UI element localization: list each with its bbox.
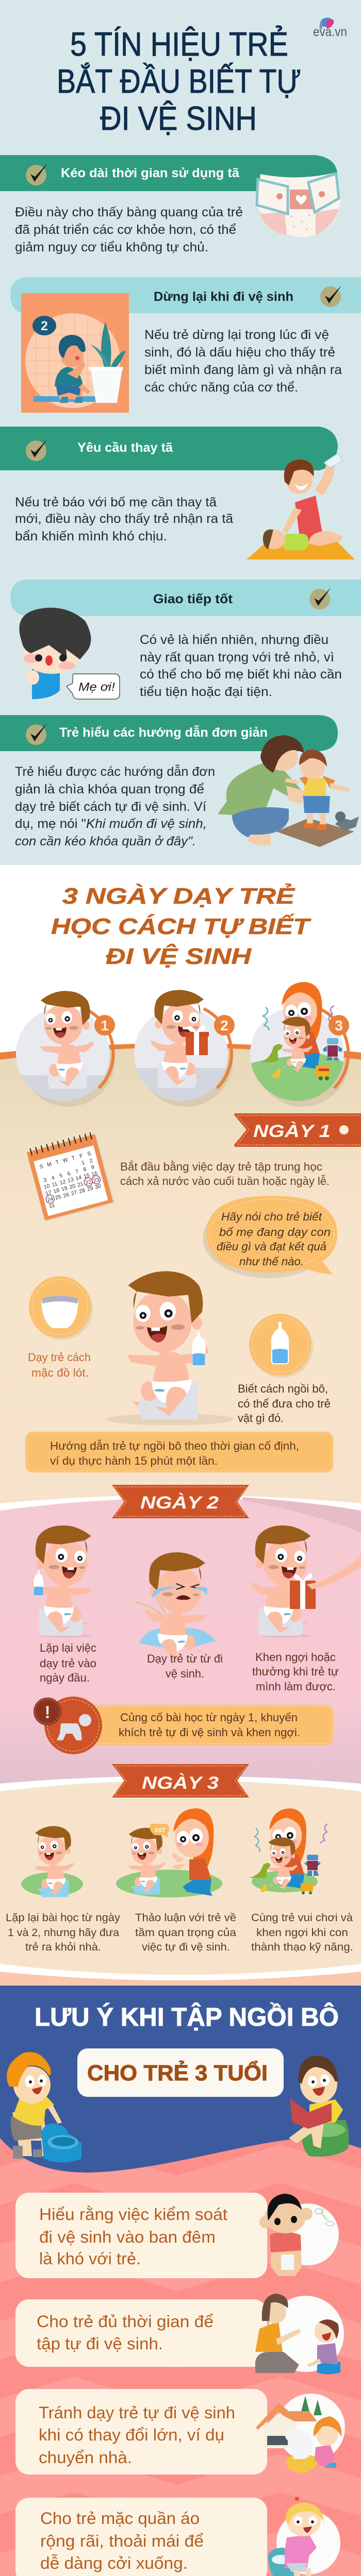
number 3 bbox=[329, 1015, 349, 1036]
icon: calendar: 20 bbox=[69, 1183, 76, 1191]
illustration: day 3 play bbox=[249, 1808, 327, 1894]
heading bar 3 bbox=[0, 427, 338, 470]
panel: signal 2 bbox=[10, 277, 361, 413]
body text 5: con cần kéo khóa quần ở đây". bbox=[15, 834, 196, 849]
text: day 1 intro: Bắt đầu bằng việc dạy trẻ tập trung học bbox=[120, 1160, 322, 1173]
icon: calendar: 18 bbox=[53, 1187, 60, 1195]
body text 2: biết mình đang làm gì và nhận ra bbox=[144, 363, 342, 377]
text: sit on potty: vật gì đó. bbox=[238, 1412, 284, 1425]
body text 5: giản là chìa khóa quan trọng để bbox=[15, 782, 204, 796]
ribbon: NGÀY 1: NGÀY 1 bbox=[253, 1122, 331, 1141]
callout: speech bubble: điều gì và đạt kết quả bbox=[217, 1240, 326, 1253]
body text 4: Có vẻ là hiển nhiên, nhưng điều bbox=[140, 633, 329, 647]
callout: day 2 box: khích trẻ tự đi vệ sinh và khen ngợi. bbox=[119, 1726, 300, 1739]
text: sit on potty: có thể đưa cho trẻ bbox=[238, 1397, 331, 1410]
text: day 2 column 1: dạy trẻ vào bbox=[40, 1657, 96, 1670]
icon: calendar: S bbox=[39, 1163, 44, 1170]
text: sit on potty: Biết cách ngồi bô, bbox=[238, 1382, 328, 1395]
icon: check 1 bbox=[26, 163, 47, 185]
illustration: girl with teal potty bbox=[268, 2497, 324, 2576]
icon: calendar: 5 bbox=[59, 1173, 63, 1179]
ribbon: NGÀY 3: NGÀY 3 bbox=[142, 1773, 219, 1793]
body text 4: có thể cho bố mẹ biết khi nào cần bbox=[140, 667, 342, 682]
text: day 3 column 2: việc tự đi vệ sinh. bbox=[142, 1941, 230, 1953]
text: day 2 column 2: Dạy trẻ từ từ đi bbox=[147, 1652, 223, 1665]
body text 3 bbox=[15, 495, 233, 544]
icon: check 5 bbox=[26, 723, 47, 745]
icon: calendar: 12 bbox=[59, 1179, 67, 1186]
illustration: worried baby bbox=[259, 2194, 313, 2276]
callout: Mẹ ơi: Mẹ ơi! bbox=[78, 680, 116, 693]
number 1 bbox=[94, 1015, 115, 1036]
callout: sst: SST bbox=[154, 1827, 166, 1834]
circle step 3 bbox=[250, 982, 349, 1107]
icon: crawling baby circle bbox=[34, 1697, 102, 1754]
icon: bottle circle bbox=[249, 1314, 313, 1378]
body text 1: đã phát triển các cơ khỏe hơn, có thể bbox=[15, 223, 236, 237]
icon: toy dinosaur bbox=[260, 1044, 283, 1062]
icon: underwear circle bbox=[29, 1276, 93, 1340]
callout: fixed time box: ví dụ thực hành 15 phút một lần. bbox=[50, 1454, 218, 1467]
text: day 2 column 3: mình làm được. bbox=[256, 1680, 336, 1693]
icon: calendar: M bbox=[46, 1161, 53, 1168]
text: day 3 column 2: tầm quan trọng của bbox=[135, 1927, 236, 1939]
icon: gift bbox=[185, 1025, 209, 1055]
white backdrop 1 bbox=[277, 2204, 339, 2265]
text: day 2 column 3: Khen ngợi hoặc bbox=[255, 1651, 336, 1664]
title: 3 days bbox=[51, 883, 311, 969]
icon: calendar: 13 bbox=[67, 1176, 74, 1184]
icon: calendar: 9 bbox=[91, 1164, 95, 1171]
title: notes: LƯU Ý KHI TẬP NGỒI BÔ bbox=[35, 2002, 339, 2031]
card shape 2 bbox=[15, 2299, 267, 2367]
body text 1 bbox=[15, 205, 243, 255]
text: day 2 column 3: thưởng khi trẻ tự bbox=[252, 1665, 339, 1678]
icon: check 4 bbox=[309, 587, 331, 609]
text: day 1 intro bbox=[120, 1160, 330, 1188]
panel: signal 3 bbox=[0, 427, 355, 560]
title: 3 days: HỌC CÁCH TỰ BIẾT bbox=[51, 913, 311, 939]
illustration: mother changing diaper bbox=[247, 453, 355, 560]
text 3 bbox=[39, 2403, 235, 2467]
body text 2 bbox=[144, 328, 342, 395]
text: day 1 intro: cách xả nước vào cuối tuần hoặc ngày lễ. bbox=[120, 1175, 330, 1188]
illustration: mother and child bbox=[218, 735, 359, 847]
body text 2: các chức năng của cơ thể. bbox=[144, 380, 298, 395]
text: day 2 column 1 bbox=[40, 1641, 96, 1684]
icon: calendar: 19 bbox=[61, 1185, 68, 1193]
badge: for 3-year-olds bbox=[77, 2048, 284, 2097]
body text 1: giảm nguy cơ tiểu không tự chủ. bbox=[15, 240, 208, 255]
heading bar 5 bbox=[0, 715, 338, 751]
body text 2: sinh, đó là dấu hiệu cho thấy trẻ bbox=[144, 345, 335, 360]
text 1: là khó với trẻ. bbox=[39, 2249, 141, 2268]
text 2: Cho trẻ đủ thời gian để bbox=[37, 2312, 214, 2331]
white backdrop 2 bbox=[268, 2296, 344, 2372]
icon: calendar: 10 bbox=[43, 1183, 51, 1191]
card 3: avoid big changes bbox=[15, 2389, 345, 2475]
icon: calendar: 23 bbox=[93, 1177, 100, 1184]
text: day 2 column 1: Lặp lại việc bbox=[40, 1641, 96, 1654]
heading bar 1 bbox=[0, 155, 338, 191]
icon: calendar: 7 bbox=[75, 1168, 79, 1175]
text: day 3 column 1: Lặp lại bài học từ ngày bbox=[6, 1912, 121, 1924]
text: day 3 column 2 bbox=[135, 1912, 236, 1953]
icon: calendar: 8 bbox=[83, 1166, 87, 1173]
icon: toy duck bbox=[272, 1069, 281, 1078]
illustration: kid reading on green potty bbox=[289, 2056, 349, 2157]
panel: signal 1 bbox=[0, 155, 340, 255]
panel: day 2 background bbox=[0, 1495, 361, 1793]
callout: day 2 box bbox=[88, 1705, 333, 1745]
title: 3 days: ĐI VỆ SINH bbox=[106, 943, 252, 969]
icon: calendar: 25 bbox=[55, 1194, 62, 1201]
text 4 bbox=[40, 2509, 204, 2572]
text 4: dễ dàng cởi xuống. bbox=[40, 2554, 188, 2572]
circle step 2 bbox=[134, 990, 235, 1107]
body text 3: mới, điều này cho thấy trẻ nhận ra tã bbox=[15, 512, 233, 526]
illustration: baby on potty with bottle bbox=[107, 1271, 234, 1425]
callout: speech bubble: Hãy nói cho trẻ biết bbox=[221, 1210, 322, 1223]
icon: calendar: F bbox=[79, 1153, 84, 1160]
icon: calendar: 3 bbox=[43, 1177, 47, 1183]
text 3: khi có thay đổi lớn, ví dụ bbox=[39, 2426, 224, 2444]
panel: signal 4 bbox=[10, 580, 361, 699]
icon: calendar: 30 bbox=[94, 1183, 102, 1191]
logo: eva.vn: eva.vn bbox=[313, 25, 347, 39]
text: teach underwear bbox=[28, 1351, 91, 1379]
heading bar 4 bbox=[10, 580, 361, 616]
card 2: enough time bbox=[15, 2294, 344, 2374]
callout: fixed time box bbox=[25, 1432, 333, 1472]
illustration: day 2 crying baby bbox=[135, 1552, 216, 1661]
card shape 3 bbox=[15, 2389, 267, 2475]
body text 4: này rất quan trọng với trẻ nhỏ, vì bbox=[140, 650, 334, 665]
icon: calendar: 6 bbox=[67, 1171, 71, 1177]
text 4: rộng rãi, thoải mái để bbox=[40, 2532, 204, 2550]
icon: calendar: 14 bbox=[75, 1174, 83, 1182]
badge: for 3-year-olds: CHO TRẺ 3 TUỔI bbox=[87, 2060, 268, 2086]
body text 3: bẩn khiến mình khó chịu. bbox=[15, 529, 167, 544]
body text 1: Điều này cho thấy bàng quang của trẻ bbox=[15, 205, 243, 219]
title: 3 days: 3 NGÀY DẠY TRẺ bbox=[62, 883, 296, 909]
icon: calendar: 16 bbox=[91, 1170, 99, 1178]
card 4: loose clothes bbox=[15, 2497, 340, 2576]
icon: calendar: 11 bbox=[51, 1181, 58, 1188]
illustration: boy and plant: 2 bbox=[41, 319, 48, 333]
icon: check 2 bbox=[320, 285, 342, 307]
panel: signal 5 bbox=[0, 715, 359, 849]
text: day 3 column 1: 1 và 2, nhưng hãy đưa bbox=[8, 1927, 119, 1939]
panel: 3 days background bbox=[0, 865, 361, 1515]
heading text 5: Trẻ hiểu các hướng dẫn đơn giản bbox=[59, 724, 268, 740]
text 1: đi vệ sinh vào ban đêm bbox=[39, 2228, 216, 2246]
heading text 3: Yêu cầu thay tã bbox=[77, 440, 173, 455]
number 2: 2 bbox=[220, 1018, 228, 1033]
number 1: 1 bbox=[101, 1018, 109, 1033]
callout: fixed time box: Hướng dẫn trẻ tự ngồi bô theo thời gian cố định, bbox=[50, 1439, 299, 1452]
icon: calendar: 27 bbox=[71, 1190, 78, 1197]
text: day 3 column 1: trẻ ra khỏi nhà. bbox=[25, 1941, 101, 1953]
icon: toy robot bbox=[323, 1038, 342, 1060]
heading text 1: Kéo dài thời gian sử dụng tã bbox=[61, 166, 239, 180]
text: day 3 column 1 bbox=[6, 1912, 121, 1953]
text: day 2 column 3 bbox=[252, 1651, 339, 1693]
white backdrop 4 bbox=[276, 2511, 340, 2574]
card shape 4 bbox=[15, 2498, 267, 2576]
callout: Mẹ ơi bbox=[67, 674, 120, 699]
title: 5 signals: BẮT ĐẦU BIẾT TỰ bbox=[57, 62, 301, 100]
icon: calendar: 4 bbox=[51, 1175, 55, 1181]
text 2 bbox=[37, 2312, 214, 2353]
icon: calendar: W bbox=[62, 1157, 69, 1164]
body text 3: Nếu trẻ báo với bố mẹ cần thay tã bbox=[15, 495, 217, 510]
illustration: boy and plant bbox=[21, 293, 129, 413]
illustration: kid with blue potty bbox=[7, 2052, 81, 2163]
text 3: Tránh dạy trẻ tự đi vệ sinh bbox=[39, 2403, 235, 2422]
icon: calendar: 31 bbox=[48, 1202, 56, 1210]
icon: calendar: T bbox=[55, 1159, 60, 1166]
ribbon: NGÀY 2: NGÀY 2 bbox=[140, 1493, 219, 1513]
icon: calendar: 24 bbox=[46, 1196, 54, 1204]
icon: calendar: 17 bbox=[45, 1189, 52, 1197]
icon: toy train bbox=[316, 1065, 330, 1080]
icon: calendar: 2 bbox=[89, 1158, 93, 1164]
text 1 bbox=[39, 2205, 227, 2268]
white backdrop 3 bbox=[277, 2394, 345, 2462]
title: 5 signals bbox=[57, 25, 301, 137]
icon: calendar: 28 bbox=[78, 1187, 86, 1195]
text 3: chuyển nhà. bbox=[39, 2448, 132, 2467]
illustration: day 2 baby with gift bbox=[251, 1526, 361, 1637]
ribbon: NGÀY 1 bbox=[234, 1113, 361, 1147]
text: day 2 column 1: ngày đầu. bbox=[40, 1671, 90, 1684]
icon: calendar: 1 bbox=[81, 1160, 86, 1166]
text: day 3 column 2: Thảo luận với trẻ về bbox=[135, 1912, 236, 1924]
callout: speech bubble bbox=[203, 1196, 337, 1278]
body text 4: tiểu tiện hoặc đại tiện. bbox=[140, 685, 272, 699]
callout: sst bbox=[150, 1824, 169, 1838]
circle step 1 bbox=[16, 991, 115, 1107]
text 2: tập tự đi vệ sinh. bbox=[37, 2334, 163, 2353]
number 2 bbox=[214, 1015, 235, 1036]
icon: calendar: 29 bbox=[86, 1185, 94, 1193]
text: teach underwear: Dạy trẻ cách bbox=[28, 1351, 91, 1364]
icon: calendar: 21 bbox=[77, 1181, 84, 1189]
card shape 1 bbox=[15, 2193, 267, 2278]
panel: 5 signals background bbox=[0, 0, 361, 865]
title: 5 signals: ĐI VỆ SINH bbox=[100, 99, 257, 137]
icon: calendar: T bbox=[71, 1155, 76, 1162]
icon: calendar: 26 bbox=[62, 1192, 70, 1199]
text: day 2 column 2 bbox=[147, 1652, 223, 1680]
text: day 3 column 3 bbox=[251, 1912, 353, 1953]
heading text 2: Dừng lại khi đi vệ sinh bbox=[154, 290, 293, 304]
icon: moon and clouds bbox=[315, 2208, 334, 2226]
text: teach underwear: mặc đồ lót. bbox=[31, 1366, 89, 1379]
illustration: day 3 baby bbox=[21, 1826, 83, 1897]
icon: diaper bbox=[256, 173, 340, 238]
icon: calendar bbox=[26, 1131, 114, 1222]
callout: day 2 box: Củng cố bài học từ ngày 1, khuyến bbox=[120, 1711, 298, 1724]
illustration: day 2 baby with bottle bbox=[31, 1526, 92, 1637]
text: day 3 column 3: khen ngợi khi con bbox=[256, 1927, 348, 1939]
icon: check 3 bbox=[26, 439, 47, 461]
icon: warning: ! bbox=[44, 1703, 51, 1722]
text: day 3 column 3: thành thạo kỹ năng. bbox=[251, 1941, 353, 1953]
body text 5: dụ, mẹ nói "Khi muốn đi vệ sinh, bbox=[15, 817, 207, 831]
logo: eva.vn bbox=[313, 18, 347, 39]
heading bar 2 bbox=[10, 277, 361, 313]
title: 5 signals: 5 TÍN HIỆU TRẺ bbox=[70, 25, 288, 63]
card 1: night control bbox=[15, 2193, 339, 2278]
panel: day 3 background bbox=[0, 1776, 361, 1986]
panel: notes background bbox=[0, 1986, 361, 2576]
text 4: Cho trẻ mặc quần áo bbox=[40, 2509, 200, 2528]
text: day 3 column 3: Cùng trẻ vui chơi và bbox=[251, 1912, 353, 1924]
ribbon: NGÀY 3 bbox=[112, 1764, 249, 1798]
illustration: boy calling bbox=[19, 607, 91, 699]
number 3: 3 bbox=[335, 1018, 343, 1033]
icon: calendar: 15 bbox=[83, 1172, 90, 1180]
callout: speech bubble: như thế nào. bbox=[239, 1255, 304, 1268]
text 1: Hiểu rằng việc kiểm soát bbox=[39, 2205, 227, 2224]
body text 2: Nếu trẻ dừng lại trong lúc đi vệ bbox=[144, 328, 329, 342]
illustration: house, girl and bunny bbox=[256, 2396, 341, 2473]
body text 5: Trẻ hiểu được các hướng dẫn đơn bbox=[15, 764, 215, 779]
body text 5 bbox=[15, 764, 215, 849]
ribbon: NGÀY 2 bbox=[112, 1485, 249, 1518]
body text 4 bbox=[140, 633, 342, 699]
callout: speech bubble: bố mẹ đang dạy con bbox=[219, 1226, 331, 1239]
icon: calendar: 22 bbox=[85, 1179, 92, 1186]
text: sit on potty bbox=[238, 1382, 331, 1425]
body text 5: dạy trẻ biết cách tự đi vệ sinh. Ví bbox=[15, 800, 206, 814]
icon: calendar: S bbox=[87, 1150, 92, 1157]
heading text 4: Giao tiếp tốt bbox=[153, 592, 233, 606]
illustration: day 3 mother talking with baby bbox=[116, 1808, 222, 1897]
illustration: mother clapping with baby bbox=[255, 2294, 340, 2374]
text: day 2 column 2: vệ sinh. bbox=[166, 1667, 204, 1680]
